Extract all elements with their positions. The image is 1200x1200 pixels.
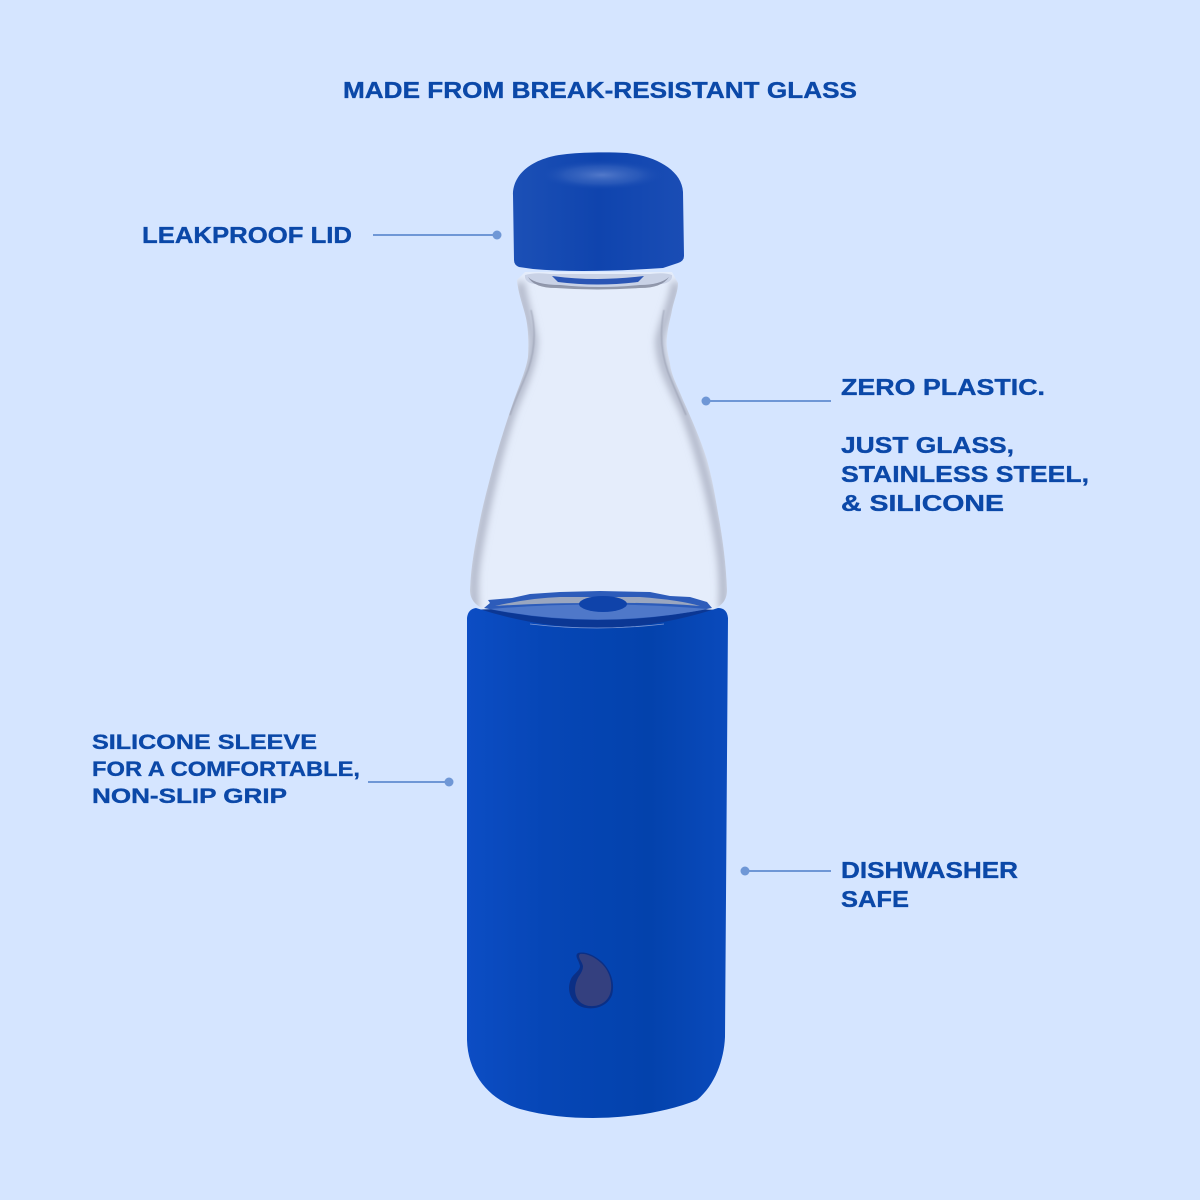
callout: silicone sleeve [92,730,454,808]
sleeve logo cutout [569,952,613,1008]
callout: silicone sleeve: NON-SLIP GRIP [92,784,287,808]
callout: leakproof lid [142,222,502,248]
callout: silicone sleeve: SILICONE SLEEVE [92,730,317,754]
callout: zero plastic: & SILICONE [841,490,1004,516]
sleeve top edge highlight [530,624,664,628]
callout: dishwasher safe [740,857,1018,912]
callout: dishwasher safe: DISHWASHER [841,857,1018,883]
callout: dishwasher safe: SAFE [841,886,909,912]
infographic canvas [92,82,1088,1118]
bottle lid [513,152,684,271]
callout: zero plastic: ZERO PLASTIC. [841,374,1045,400]
glass neck rim [525,273,672,290]
glass body [470,272,727,610]
lid highlight [540,160,664,190]
glass edge shading [474,282,533,610]
title: MADE FROM BREAK-RESISTANT GLASS [343,77,857,103]
callout: silicone sleeve: FOR A COMFORTABLE, [92,757,360,781]
callout: zero plastic [702,374,1089,516]
callout: leakproof lid: LEAKPROOF LID [142,222,352,248]
callout: zero plastic: JUST GLASS, [841,432,1014,458]
callout: zero plastic: STAINLESS STEEL, [841,461,1089,487]
water line in glass base [473,591,720,628]
bottle [460,152,740,1118]
silicone sleeve [467,608,728,1118]
